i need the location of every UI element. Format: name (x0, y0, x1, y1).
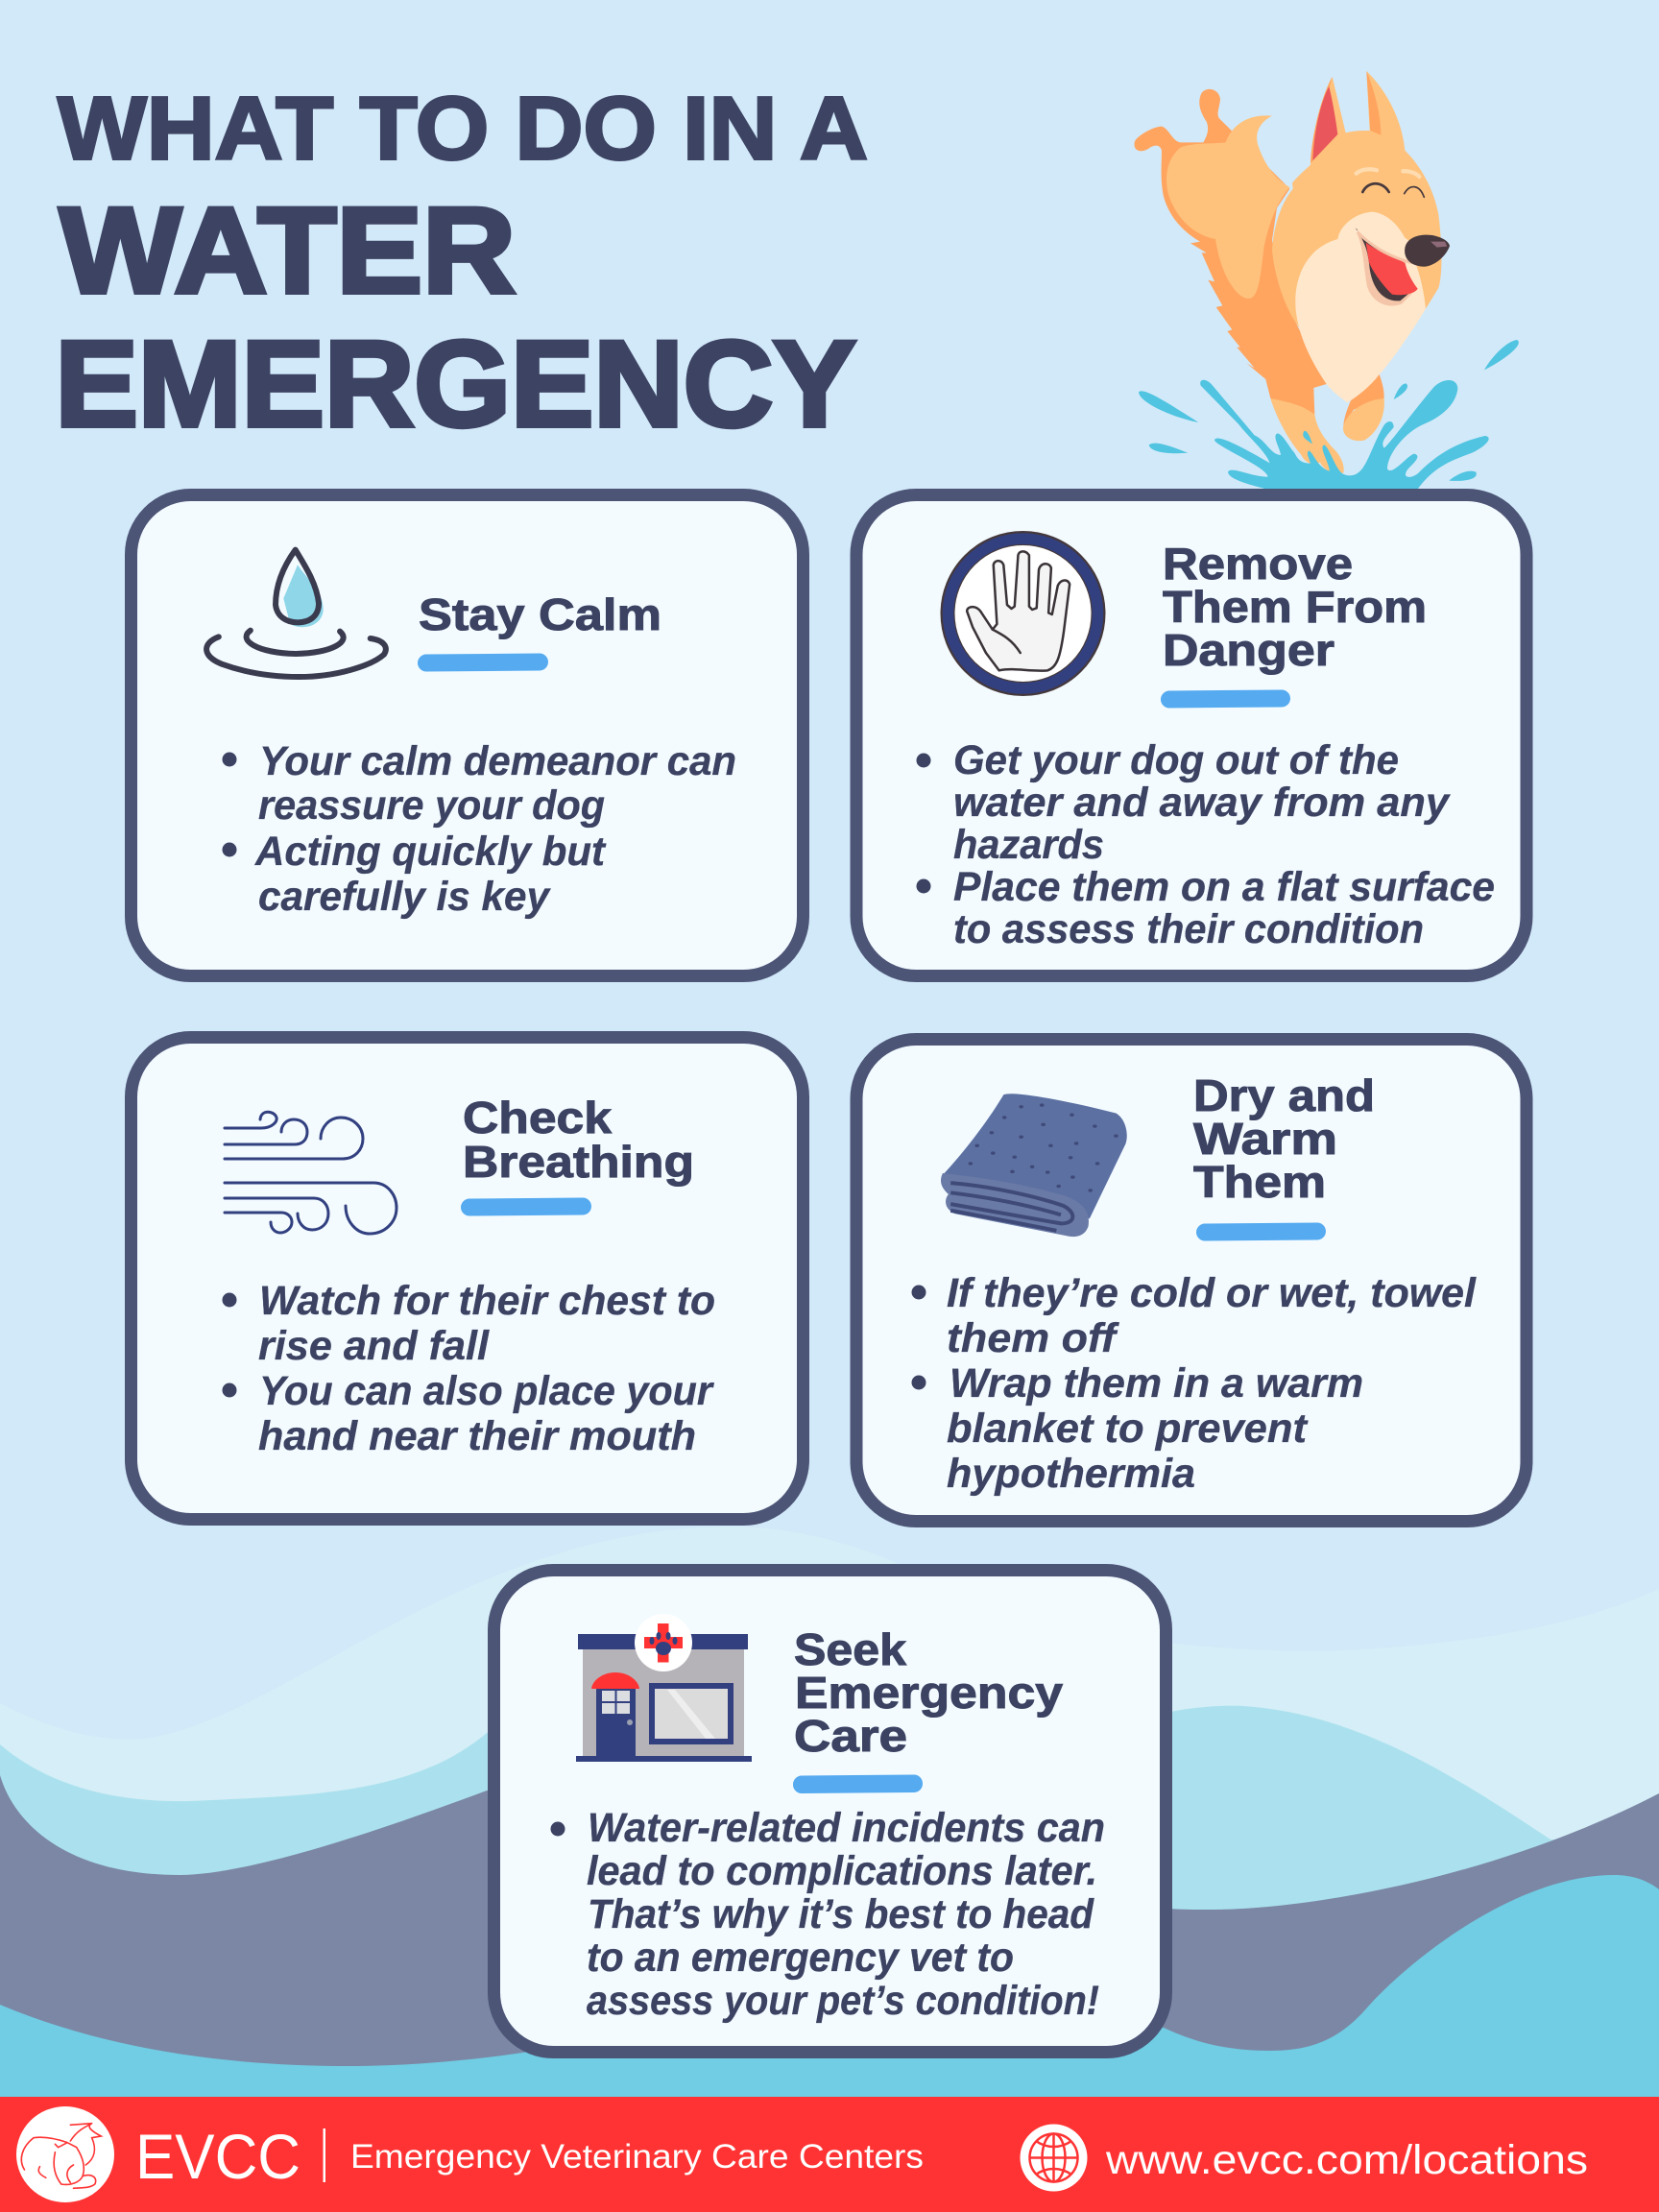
bullet list: Place them on a flat surface (953, 864, 1495, 910)
bullet list: water and away from any (953, 780, 1451, 826)
footer bar (0, 2097, 1659, 2212)
panel: seek emergency care (493, 1571, 1166, 2053)
bullet list: Watch for their chest to (259, 1278, 715, 1324)
bullet list: assess your pet’s condition! (587, 1978, 1099, 2024)
title: WATER (60, 182, 516, 319)
icon: stop hand (948, 538, 1098, 689)
heading: remove them from danger: Danger (1163, 625, 1334, 675)
heading: check breathing: Check (463, 1093, 612, 1142)
heading: check breathing: Breathing (463, 1137, 694, 1187)
title: WHAT TO DO IN A (58, 79, 868, 179)
heading: dry and warm them: Dry and (1193, 1070, 1375, 1120)
bullet list (223, 738, 736, 920)
heading: dry and warm them: Warm (1193, 1114, 1337, 1164)
bullet list: rise and fall (258, 1323, 490, 1369)
bullet list: That’s why it’s best to head (588, 1891, 1094, 1937)
icon: vet clinic building (576, 1614, 752, 1762)
panel: remove them from danger (856, 495, 1527, 975)
bullet list: Acting quickly but (254, 829, 607, 875)
bullet list (912, 1270, 1477, 1497)
icon: wind (225, 1112, 397, 1234)
heading: remove them from danger: Them From (1163, 582, 1427, 632)
background waves (0, 1527, 1659, 2212)
heading: dry and warm them: Them (1193, 1157, 1326, 1207)
heading underline (418, 653, 548, 672)
icon: evcc cat and dog logo (16, 2106, 114, 2202)
heading: stay calm: Stay Calm (419, 589, 661, 639)
heading: seek emergency care: Emergency (795, 1668, 1063, 1718)
bullet list: blanket to prevent (947, 1406, 1309, 1452)
heading underline (1161, 689, 1290, 709)
heading underline (461, 1197, 591, 1216)
bullet list (223, 1278, 715, 1459)
bullet list: Wrap them in a warm (950, 1360, 1363, 1407)
bullet list: carefully is key (258, 874, 551, 920)
heading: seek emergency care: Care (794, 1711, 907, 1761)
title: EMERGENCY (56, 315, 856, 451)
bullet list: Your calm demeanor can (259, 738, 736, 784)
bullet list: hand near their mouth (258, 1413, 696, 1459)
heading: check breathing (463, 1093, 694, 1187)
icon: water drop with ripples (206, 550, 386, 677)
bullet list: Get your dog out of the (953, 737, 1399, 783)
bullet list: lead to complications later. (587, 1848, 1097, 1894)
panel: stay calm (131, 495, 803, 975)
bullet list: hypothermia (947, 1451, 1195, 1497)
heading: remove them from danger: Remove (1163, 539, 1353, 589)
bullet list: If they’re cold or wet, towel (947, 1270, 1477, 1316)
dog illustration (1134, 71, 1519, 489)
logo divider (323, 2128, 325, 2182)
icon: folded blanket (941, 1094, 1127, 1237)
heading: remove them from danger (1163, 539, 1427, 675)
bullet list (551, 1805, 1105, 2024)
heading: seek emergency care (794, 1624, 1063, 1761)
website url: www.evcc.com/locations (1105, 2137, 1588, 2183)
bullet list: Water-related incidents can (588, 1805, 1105, 1851)
bullet list: You can also place your (259, 1368, 714, 1414)
bullet list: to assess their condition (953, 906, 1424, 952)
heading underline (1196, 1222, 1326, 1241)
panel: dry and warm them (856, 1039, 1527, 1521)
icon: globe (1020, 2124, 1087, 2191)
bullet list: hazards (953, 822, 1104, 868)
heading: seek emergency care: Seek (794, 1624, 906, 1674)
heading underline (793, 1774, 923, 1793)
bullet list (916, 737, 1495, 952)
bullet list: them off (947, 1315, 1119, 1361)
bullet list: reassure your dog (258, 782, 605, 829)
title (56, 79, 868, 451)
logo wordmark: EVCC: EVCC (135, 2121, 301, 2192)
panel: check breathing (131, 1037, 803, 1519)
bullet list: to an emergency vet to (587, 1935, 1014, 1981)
logo tagline: Emergency Veterinary Care Centers (350, 2138, 924, 2176)
heading: dry and warm them (1193, 1070, 1375, 1207)
